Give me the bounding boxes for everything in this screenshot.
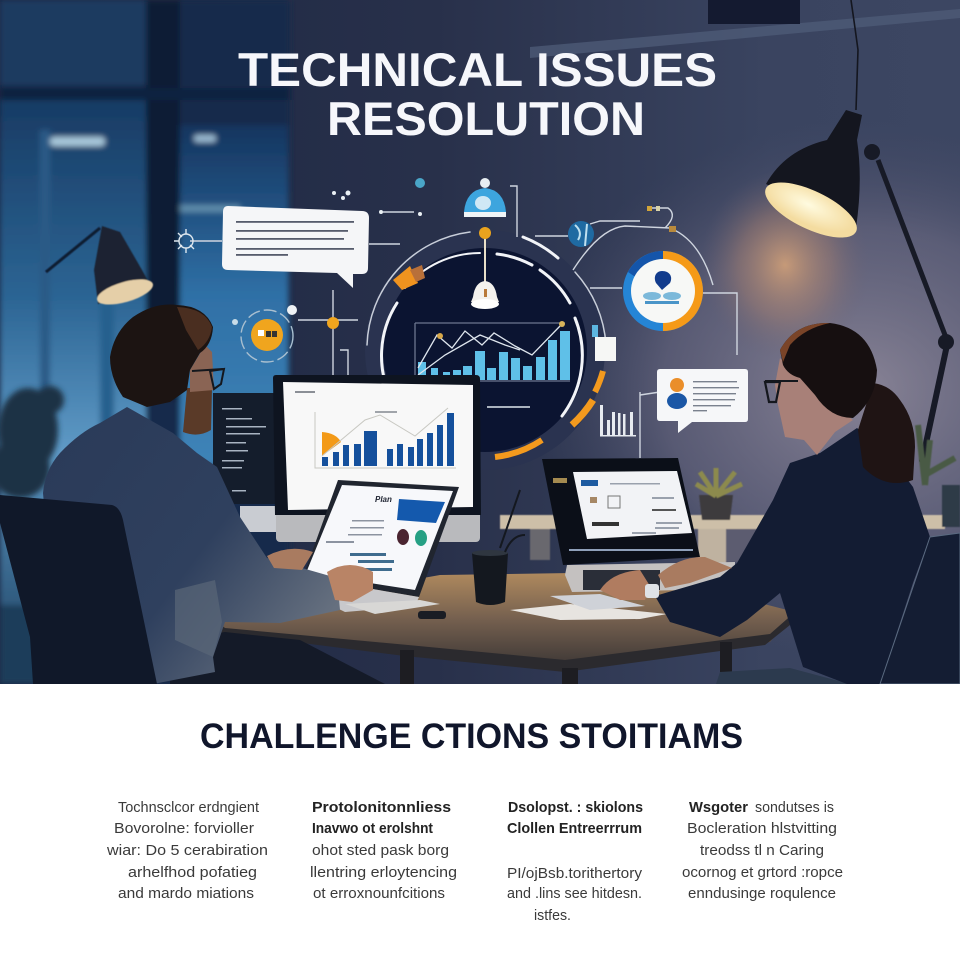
column 2 text: ot erroxnounfcitions (313, 885, 445, 902)
column 3 text: istfes. (534, 907, 571, 924)
column 3 text: Clollen Entreerrrum (507, 820, 642, 837)
column 3 text: PI/ojBsb.torithertory (507, 865, 643, 882)
hands (600, 570, 650, 600)
orange ring segments (495, 371, 603, 457)
hair (780, 323, 877, 418)
column 3 text (507, 799, 643, 924)
laptop lines (326, 520, 394, 571)
window panes (0, 0, 290, 684)
column 4 text: sondutses is (755, 799, 834, 816)
orange wedge (322, 432, 341, 456)
column 2 text: ohot sted pask borg (312, 842, 449, 859)
icon: gear (174, 229, 194, 253)
title: RESOLUTION (327, 92, 645, 145)
profile icon (667, 378, 687, 409)
column 4 text: Wsgoter (689, 799, 748, 816)
dark disc (383, 248, 587, 452)
column 1 text (106, 799, 268, 902)
background right desk and plant (500, 425, 960, 565)
table (210, 572, 795, 684)
bubble text lines (236, 221, 354, 256)
curly hair highlight (177, 307, 212, 350)
glasses (765, 381, 798, 402)
hair (110, 304, 213, 407)
icon: orange junction (327, 317, 339, 329)
torso and arm (43, 407, 340, 684)
title: TECHNICAL ISSUES (238, 43, 717, 96)
bell icon and stem (471, 227, 499, 309)
column 4 text: treodss tl n Caring (700, 842, 824, 859)
column 4 text: enndusinge roqulence (688, 885, 836, 902)
column 2 text: llentring erloytencing (310, 864, 457, 881)
column 2 text: Inavwo ot erolshnt (312, 820, 433, 837)
column 1 text: wiar: Do 5 cerabiration (106, 842, 268, 859)
column 4 text: ocornog et grtord :ropce (682, 864, 843, 881)
title (238, 43, 717, 145)
pot plant (696, 468, 742, 520)
watch (645, 584, 659, 598)
armrest (716, 668, 850, 684)
man at desk (0, 304, 385, 684)
face side (190, 345, 214, 392)
column 4 text (682, 799, 843, 902)
central circular dashboard (362, 227, 616, 470)
warm lamp glow on wall (700, 170, 870, 360)
ceiling beam (530, 9, 960, 58)
laptop badges (397, 529, 427, 546)
woman at desk (600, 323, 960, 684)
office background (0, 0, 960, 684)
icon: yellow face node (232, 305, 297, 362)
right laptop screen details (590, 483, 682, 534)
icon: globe (568, 221, 594, 247)
background plant (0, 386, 64, 498)
column 1 text: arhelfhod pofatieg (128, 864, 257, 881)
coffee mug (472, 550, 508, 605)
hands (327, 565, 373, 602)
left laptop (300, 480, 459, 612)
desk plant stems (500, 490, 525, 552)
laptop title: Plan (375, 495, 392, 504)
right floor lamp (758, 0, 954, 462)
torso and arm (655, 428, 930, 684)
column 3 text: and .lins see hitdesn. (507, 885, 642, 902)
column 2 text (310, 799, 457, 902)
left desk lamp (46, 226, 156, 310)
right laptop (542, 458, 735, 592)
bar chart in disc (418, 331, 570, 380)
office chair (0, 495, 157, 684)
column 3 text: Dsolopst. : skiolons (508, 799, 643, 816)
callout: left speech bubble (222, 206, 369, 288)
monitor chart bars (322, 413, 454, 466)
callout: right profile bubble (657, 369, 748, 433)
dark seat under table (170, 632, 385, 684)
lower white panel (0, 684, 960, 960)
column 2 text: Protolonitonnliess (312, 799, 451, 816)
lavender lit wall (530, 120, 960, 660)
circuit connector lines (190, 186, 737, 458)
laptop dashboard card (397, 499, 445, 523)
user icon in donut (643, 271, 681, 304)
column 1 text: and mardo miations (118, 885, 254, 902)
column 1 text: Tochnsclcor erdngient (118, 799, 260, 816)
white tab on ring (595, 337, 616, 361)
profile text lines (693, 381, 739, 411)
chair (880, 533, 960, 684)
far right plant (918, 425, 955, 485)
small bar chart icon (600, 405, 636, 436)
ponytail (858, 383, 915, 483)
papers (345, 594, 667, 620)
glasses (192, 369, 224, 389)
face and neck (775, 358, 853, 455)
column 4 text: Bocleration hlstvitting (687, 820, 837, 837)
column 1 text: Bovorolne: forvioller (114, 820, 254, 837)
hair highlight (780, 323, 830, 362)
line chart and axes (415, 323, 570, 407)
main monitor with bar chart (273, 375, 481, 542)
donut chart (623, 251, 703, 331)
icon: small nodes (332, 178, 676, 232)
section heading: CHALLENGE CTIONS STOITIAMS (200, 717, 743, 756)
icon: dome user (464, 178, 506, 217)
white ring arcs (362, 232, 606, 425)
shirt crumple highlight (175, 580, 222, 657)
chart axes and trend (315, 408, 456, 468)
beard (183, 388, 212, 435)
back code monitor (213, 393, 277, 532)
